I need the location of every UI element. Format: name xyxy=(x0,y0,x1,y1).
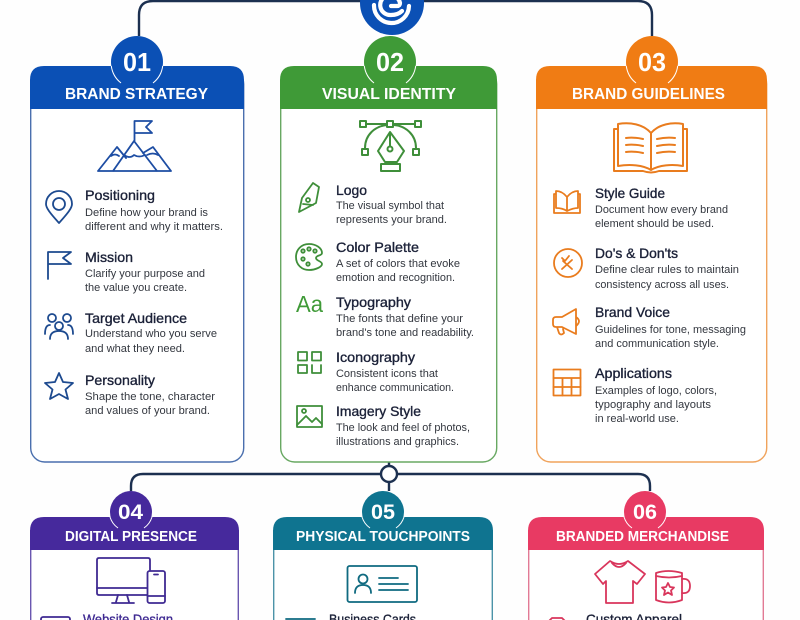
item: logo: The visual symbol that xyxy=(336,200,444,212)
icon: pen tool xyxy=(360,121,421,171)
item: typography: brand's tone and readability. xyxy=(336,327,474,339)
item: target audience: Understand who you serve xyxy=(85,328,217,340)
item: target audience: and what they need. xyxy=(85,343,185,355)
panel: brand guidelines xyxy=(536,36,767,462)
item: dos and donts: consistency across all uses. xyxy=(595,279,729,291)
number badge xyxy=(110,491,152,533)
item: brand voice: Brand Voice xyxy=(595,304,670,320)
item: dos and donts: Do's & Don'ts xyxy=(595,245,678,261)
heading: DIGITAL PRESENCE xyxy=(65,529,197,545)
number badge: 06 xyxy=(633,501,657,524)
item: positioning: Define how your brand is xyxy=(85,207,208,219)
item: applications: typography and layouts xyxy=(595,399,712,411)
item: color palette: Color Palette xyxy=(336,239,419,255)
item: business cards xyxy=(286,611,416,620)
item: style guide: element should be used. xyxy=(595,218,714,230)
header xyxy=(273,517,493,550)
item: personality: and values of your brand. xyxy=(85,405,210,417)
header xyxy=(30,517,239,550)
header xyxy=(30,66,244,109)
item: dos and donts: Define clear rules to maintain xyxy=(595,264,739,276)
item: color palette xyxy=(296,239,460,284)
number badge xyxy=(364,36,416,88)
item: applications: Applications xyxy=(595,365,672,381)
central logo xyxy=(360,0,424,35)
heading: PHYSICAL TOUCHPOINTS xyxy=(296,529,470,545)
icon: open book xyxy=(614,123,687,172)
bottom connector line xyxy=(131,460,650,491)
item: applications: Examples of logo, colors, xyxy=(595,385,717,397)
item: style guide: Document how every brand xyxy=(595,204,728,216)
item: personality xyxy=(45,372,215,417)
item: mission: Clarify your purpose and xyxy=(85,268,205,280)
item: iconography: Iconography xyxy=(336,349,415,365)
item: color palette: emotion and recognition. xyxy=(336,272,455,284)
number badge xyxy=(362,491,404,533)
item: brand voice: and communication style. xyxy=(595,338,719,350)
item: mission: the value you create. xyxy=(85,282,187,294)
number badge xyxy=(111,36,163,88)
number badge: 05 xyxy=(371,501,395,524)
item: positioning xyxy=(46,187,223,233)
header xyxy=(536,66,767,109)
number badge: 02 xyxy=(376,47,404,77)
heading: BRAND STRATEGY xyxy=(65,86,208,103)
heading: BRAND GUIDELINES xyxy=(572,86,725,103)
item: color palette: A set of colors that evoke xyxy=(336,258,460,270)
header xyxy=(280,66,497,109)
panel: digital presence xyxy=(30,491,239,620)
panel: visual identity xyxy=(280,36,497,462)
icon: mountain flag xyxy=(98,121,171,171)
item: imagery style: Imagery Style xyxy=(336,403,421,419)
item: imagery style: The look and feel of photos, xyxy=(336,422,470,434)
item: applications: in real-world use. xyxy=(595,413,679,425)
item: iconography: enhance communication. xyxy=(336,382,454,394)
item: logo: Logo xyxy=(336,182,367,198)
item: brand voice: Guidelines for tone, messaging xyxy=(595,324,746,336)
heading: BRANDED MERCHANDISE xyxy=(556,529,729,545)
item: target audience xyxy=(45,310,217,355)
item: personality: Shape the tone, character xyxy=(85,391,215,403)
item: mission xyxy=(48,249,205,294)
item: personality: Personality xyxy=(85,372,155,388)
item: imagery style xyxy=(297,403,470,448)
item: logo: represents your brand. xyxy=(336,214,447,226)
item: imagery style: illustrations and graphics. xyxy=(336,436,459,448)
item: iconography: Consistent icons that xyxy=(336,368,438,380)
panel: physical touchpoints xyxy=(273,491,493,620)
icon: business card xyxy=(348,566,417,602)
item: dos and donts xyxy=(554,245,739,291)
icon: monitor and phone xyxy=(97,558,165,603)
item: iconography xyxy=(298,349,454,394)
heading: VISUAL IDENTITY xyxy=(322,86,456,103)
number badge: 04 xyxy=(118,501,143,524)
item: custom apparel xyxy=(546,611,682,620)
connector node xyxy=(381,466,397,482)
item: website design xyxy=(41,611,173,620)
icon: t-shirt and mug xyxy=(595,561,690,603)
item: logo xyxy=(299,182,447,226)
number badge xyxy=(624,491,666,533)
header xyxy=(528,517,764,550)
item: typography: Typography xyxy=(336,294,411,310)
item: typography: The fonts that define your xyxy=(336,313,463,325)
item: applications xyxy=(554,365,717,425)
item: mission: Mission xyxy=(85,249,133,265)
item: style guide xyxy=(554,185,728,230)
number badge: 03 xyxy=(638,47,666,77)
item: target audience: Target Audience xyxy=(85,310,187,326)
panel: brand strategy xyxy=(30,36,244,462)
item: typography: Aa xyxy=(296,291,323,317)
item: style guide: Style Guide xyxy=(595,185,665,201)
item: positioning: different and why it matters. xyxy=(85,221,223,233)
number badge xyxy=(626,36,678,88)
top connector line xyxy=(139,1,652,36)
number badge: 01 xyxy=(123,47,151,77)
item: positioning: Positioning xyxy=(85,187,155,203)
item: brand voice xyxy=(553,304,746,350)
item: typography xyxy=(296,291,474,339)
panel: branded merchandise xyxy=(528,491,764,620)
